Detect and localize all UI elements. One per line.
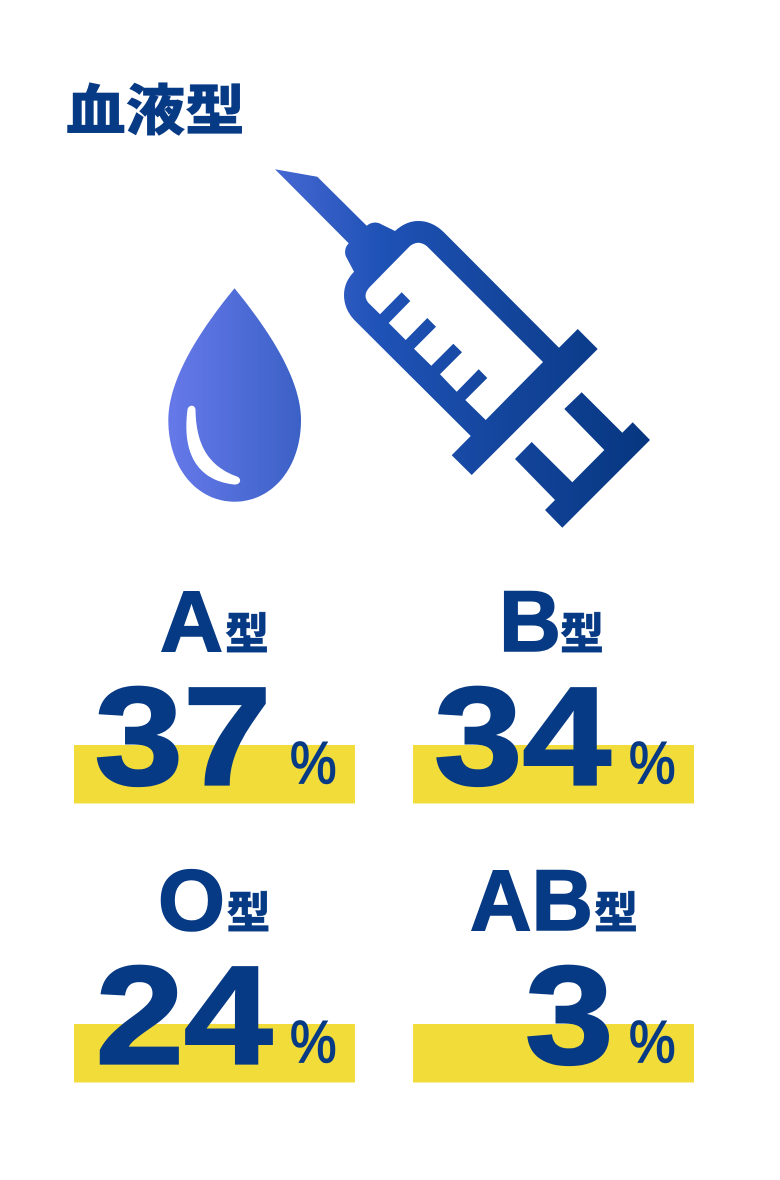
icon: syringe: [275, 169, 650, 528]
label O型: O: [158, 853, 225, 949]
highlight bar A: [74, 745, 355, 804]
value 34: 34: [434, 658, 611, 814]
label B型: 型: [560, 610, 604, 659]
stat: B type 34%: [413, 574, 694, 814]
value 24: 24: [96, 936, 273, 1094]
percent sign: %: [290, 1009, 336, 1075]
highlight bar AB: [413, 1024, 694, 1082]
label B型: [499, 574, 604, 670]
value 37: 37: [94, 658, 272, 814]
label O型: [158, 853, 270, 949]
label O型: 型: [226, 889, 270, 938]
stat: AB type 3%: [413, 853, 694, 1094]
label A型: A: [160, 574, 223, 670]
label AB型: AB: [470, 853, 593, 949]
label AB型: 型: [594, 889, 638, 938]
percent sign: %: [629, 730, 676, 796]
stat: O type 24%: [74, 853, 355, 1094]
label A型: 型: [225, 610, 269, 659]
label A型: [160, 574, 269, 670]
title: 血液型: [66, 81, 245, 142]
stat: A type 37%: [74, 574, 355, 814]
icon: blood drop: [168, 288, 301, 502]
highlight bar O: [74, 1024, 355, 1082]
value 3: 3: [525, 936, 614, 1094]
label B型: B: [499, 574, 561, 670]
percent sign: %: [629, 1009, 676, 1075]
highlight bar B: [413, 745, 694, 804]
percent sign: %: [290, 730, 336, 796]
